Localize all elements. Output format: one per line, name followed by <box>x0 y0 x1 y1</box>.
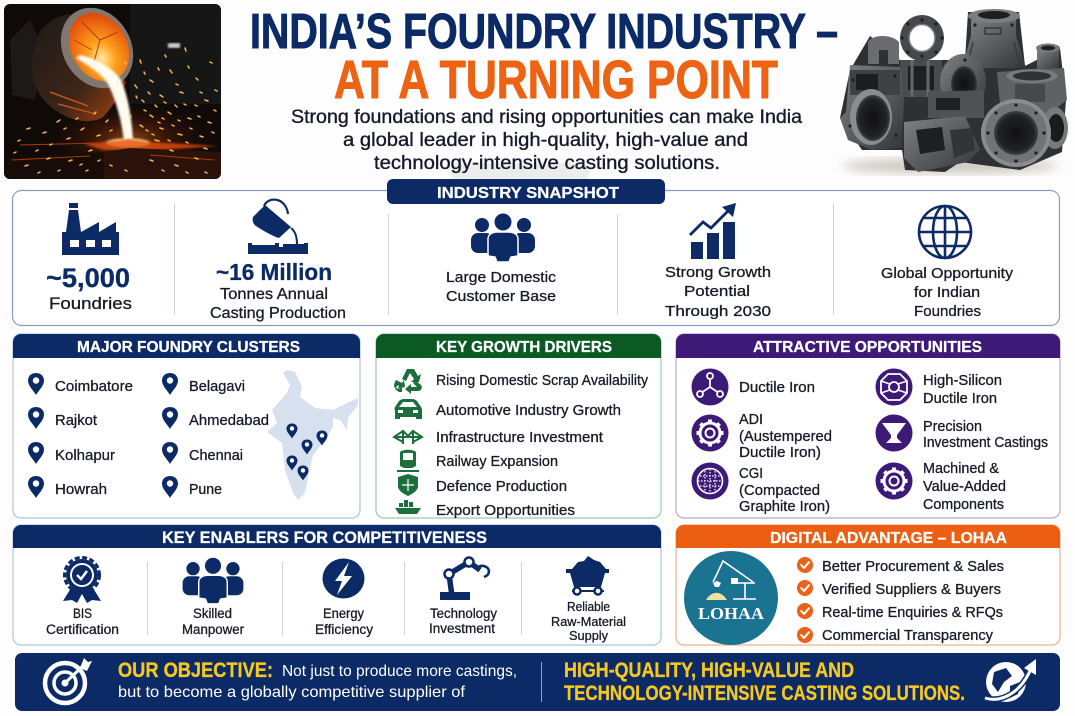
subtitle: technology-intensive casting solutions. <box>374 153 720 174</box>
panel: digital advantage - LOHAA <box>676 525 1060 645</box>
map: India with cluster pins <box>267 370 358 500</box>
heading: industry snapshot <box>387 179 665 204</box>
heading: clusters <box>13 334 360 358</box>
stat: customer base <box>446 269 557 305</box>
middle flange casting <box>940 54 986 110</box>
icon: globe <box>919 206 971 258</box>
panel: key growth drivers <box>376 334 661 519</box>
stat: casting production: Casting Production <box>210 305 346 322</box>
enabler labels <box>46 599 626 643</box>
banner: our objective <box>15 653 1060 711</box>
icon: pouring ladle <box>248 200 308 254</box>
icon: ADI gear <box>692 414 728 452</box>
opportunity list: Precision <box>923 419 982 435</box>
enabler labels: Manpower <box>182 622 244 637</box>
stat: customer base: Customer Base <box>446 288 556 305</box>
opportunity list: (Compacted <box>739 483 820 499</box>
icon: ductile iron <box>692 368 728 406</box>
panel: industry snapshot <box>12 179 1060 326</box>
photo: molten metal pouring from ladle <box>4 0 221 179</box>
opportunity list: Value-Added <box>923 479 1006 495</box>
heading: enablers: KEY ENABLERS FOR COMPETITIVENESS <box>162 528 487 547</box>
stat: global opportunity: for Indian <box>914 284 980 301</box>
heading: digital advantage: DIGITAL ADVANTAGE – LOHAA <box>770 530 1007 547</box>
objective text: but to become a globally competitive supplier of <box>118 684 466 701</box>
icon: bridge <box>394 430 422 444</box>
subtitle: a global leader in high-quality, high-value and <box>343 130 748 151</box>
heading: opportunities: ATTRACTIVE OPPORTUNITIES <box>753 339 982 356</box>
opportunity list: Investment Castings <box>923 435 1048 451</box>
opportunity list: Ductile Iron <box>739 380 815 396</box>
subtitle: Strong foundations and rising opportunities can make India <box>291 107 802 128</box>
benefit list: Real-time Enquiries & RFQs <box>822 604 1003 621</box>
heading: digital advantage <box>676 525 1060 548</box>
stat: global opportunity <box>881 265 1014 320</box>
enabler labels: Investment <box>429 621 495 636</box>
icon: CGI <box>692 462 728 500</box>
objective highlight: TECHNOLOGY-INTENSIVE CASTING SOLUTIONS. <box>564 682 965 705</box>
driver list: Infrastructure Investment <box>436 430 603 446</box>
icon: factory <box>62 203 119 255</box>
stat: foundries: Foundries <box>49 295 132 313</box>
title <box>250 5 838 110</box>
cluster list: Howrah <box>55 481 107 498</box>
photo: pile of metal castings <box>840 9 1068 174</box>
icon: certification badge <box>63 558 101 603</box>
opportunity list: CGI <box>739 466 763 482</box>
objective text: OUR OBJECTIVE: <box>118 659 273 682</box>
objective text <box>118 659 517 701</box>
icon: customers <box>471 214 535 262</box>
icon: robot arm <box>440 558 489 600</box>
driver list: Rising Domestic Scrap Availability <box>436 373 649 389</box>
left housing casting <box>840 65 904 150</box>
objective highlight: HIGH-QUALITY, HIGH-VALUE AND <box>564 659 854 682</box>
driver list: Railway Expansion <box>436 454 558 470</box>
stat: growth potential: Strong Growth <box>665 264 771 281</box>
icon: train <box>397 450 419 472</box>
cluster list: Kolhapur <box>55 447 115 464</box>
icon: target <box>45 658 92 703</box>
enabler labels: Efficiency <box>315 622 373 637</box>
yoke casting <box>868 36 942 97</box>
benefit list: Verified Suppliers & Buyers <box>822 581 1001 598</box>
enabler labels: Certification <box>46 622 119 637</box>
opportunity list <box>739 373 1048 515</box>
ring flange <box>900 15 944 61</box>
right small flange <box>1042 107 1068 149</box>
icon: globe with arrow <box>985 659 1036 702</box>
enabler labels: Reliable <box>567 599 610 614</box>
title: AT A TURNING POINT <box>334 50 778 110</box>
enabler labels: Skilled <box>193 606 232 621</box>
stat: casting production: ~16 Million <box>216 259 332 285</box>
opportunity list: Ductile Iron <box>923 391 997 407</box>
stat: growth potential <box>665 264 771 320</box>
cluster list: Chennai <box>189 447 243 464</box>
enabler labels: Technology <box>430 606 497 621</box>
icon: high-silicon <box>876 368 912 406</box>
benefit list <box>797 557 1004 644</box>
icon: shield <box>398 474 418 496</box>
driver list: Defence Production <box>436 479 567 495</box>
benefit list: Better Procurement & Sales <box>822 558 1004 575</box>
opportunity list: (Austempered <box>739 429 832 445</box>
stat: casting production <box>210 259 346 322</box>
opportunity list: Machined & <box>923 461 999 477</box>
big front flange <box>981 99 1051 167</box>
driver list: Export Opportunities <box>436 503 575 519</box>
panel: key enablers for competitiveness <box>13 525 661 645</box>
cluster list: Pune <box>189 481 222 498</box>
icon: skilled manpower <box>183 558 243 604</box>
cluster list: Rajkot <box>55 412 98 429</box>
driver list <box>436 373 649 519</box>
opportunity list: Components <box>923 497 1004 513</box>
icon: raw material cart <box>566 556 609 594</box>
stat: customer base: Large Domestic <box>446 269 557 286</box>
top cylinder casting <box>962 9 1026 68</box>
stat: foundries <box>46 263 132 313</box>
cluster list: Belagavi <box>189 378 245 395</box>
panel: attractive opportunities <box>676 334 1060 518</box>
icon: recycle <box>394 369 422 394</box>
title: INDIA’S FOUNDRY INDUSTRY – <box>250 5 838 59</box>
heading: clusters: MAJOR FOUNDRY CLUSTERS <box>77 339 300 356</box>
heading: growth drivers: KEY GROWTH DRIVERS <box>436 339 612 356</box>
enabler labels: Supply <box>569 628 608 643</box>
driver list: Automotive Industry Growth <box>436 403 621 419</box>
objective text: Not just to produce more castings, <box>282 663 517 680</box>
icon: machined components <box>876 462 912 500</box>
enabler labels: Energy <box>323 606 364 621</box>
stat: foundries: ~5,000 <box>46 263 130 293</box>
panel: major foundry clusters <box>13 334 360 518</box>
icon: precision castings <box>876 414 912 452</box>
mid and bottom block castings <box>904 90 984 172</box>
heading: opportunities <box>676 334 1060 358</box>
stat: growth potential: Potential <box>684 283 750 300</box>
icon: energy <box>322 558 364 598</box>
opportunity list: Ductile Iron) <box>739 445 821 461</box>
heading: industry snapshot: INDUSTRY SNAPSHOT <box>437 185 619 202</box>
enabler labels: Raw-Material <box>551 614 626 629</box>
cluster list <box>28 373 269 498</box>
cluster list: Coimbatore <box>55 378 133 395</box>
cluster list: Ahmedabad <box>189 412 269 429</box>
opportunity list: High-Silicon <box>923 373 1002 389</box>
stat: global opportunity: Foundries <box>914 303 981 320</box>
stat: growth potential: Through 2030 <box>665 303 771 320</box>
subtitle <box>291 107 802 174</box>
icon: ship <box>395 500 421 514</box>
faint watermark smudge <box>450 163 590 179</box>
stat: global opportunity: Global Opportunity <box>881 265 1014 282</box>
heading: enablers <box>13 525 661 548</box>
right block casting <box>997 44 1067 118</box>
logo: LOHAA: LOHAA <box>698 604 765 623</box>
icon: car <box>395 399 422 419</box>
enabler labels: BIS <box>73 606 92 621</box>
benefit list: Commercial Transparency <box>822 627 993 644</box>
icon: growth chart <box>690 203 736 259</box>
logo: LOHAA <box>684 551 778 645</box>
opportunity list: ADI <box>739 412 763 428</box>
opportunity list: Graphite Iron) <box>739 499 830 515</box>
stat: casting production: Tonnes Annual <box>220 286 328 303</box>
objective highlight <box>564 659 965 705</box>
heading: growth drivers <box>376 334 661 358</box>
